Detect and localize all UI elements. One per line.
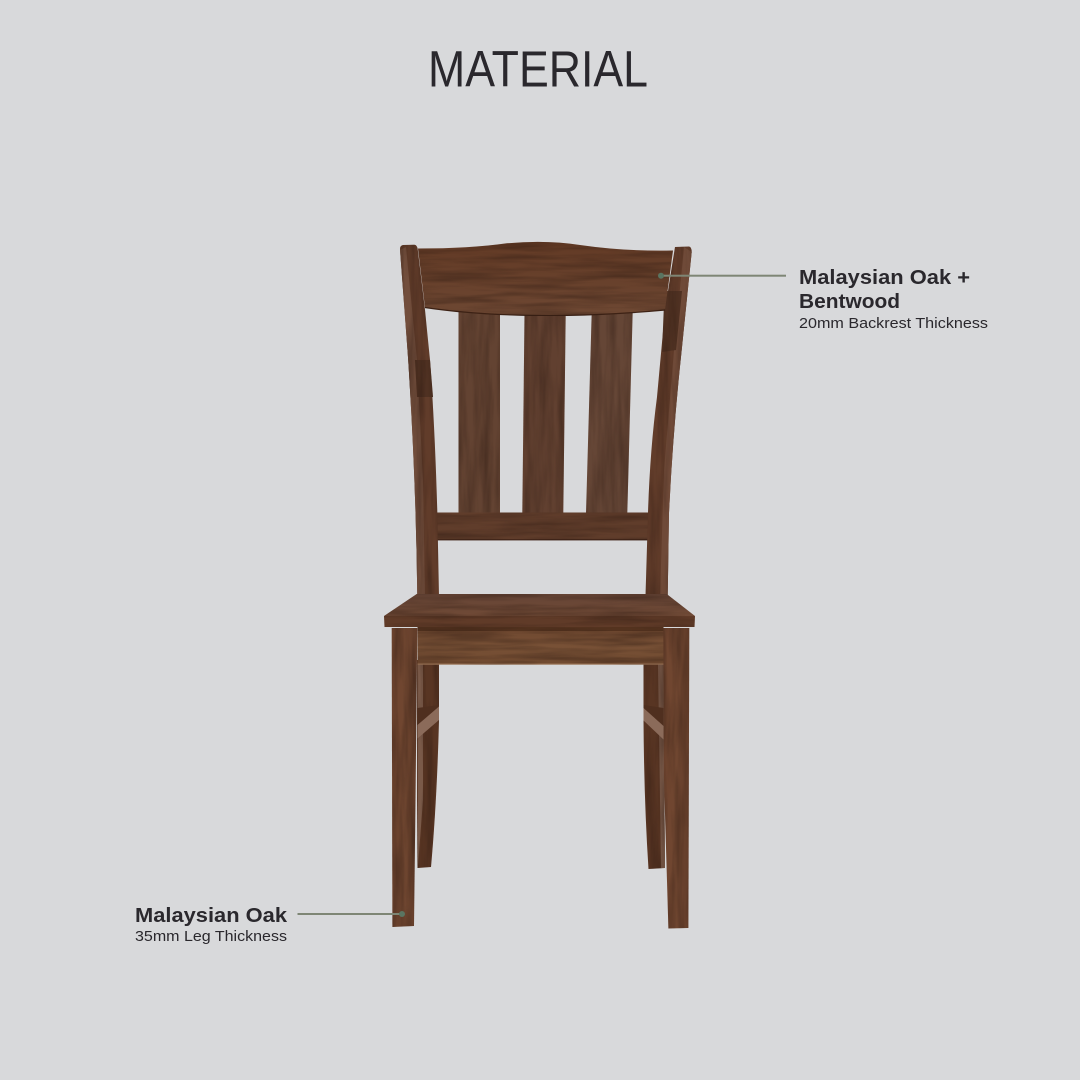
right back post — [646, 246, 692, 596]
chair illustration — [384, 242, 695, 928]
label: Malaysian Oak: Malaysian Oak — [135, 904, 288, 927]
front left leg — [392, 628, 417, 927]
title: MATERIAL — [428, 40, 648, 98]
left stretcher — [418, 705, 439, 738]
front right leg — [663, 628, 689, 928]
callout: leg material — [135, 904, 405, 945]
seat front edge — [384, 616, 695, 627]
seat — [384, 594, 695, 627]
label: Malaysian Oak + Bentwood: Malaysian Oak + — [799, 266, 970, 289]
leader line and dot: leg — [298, 911, 405, 917]
seat top — [384, 594, 695, 616]
lower back rail — [436, 512, 650, 540]
left back post — [400, 245, 439, 596]
crest rail — [418, 242, 673, 316]
label: Malaysian Oak + Bentwood: Bentwood — [799, 290, 900, 313]
callout: backrest material — [658, 266, 988, 332]
back left leg — [417, 660, 439, 868]
apron — [418, 627, 664, 665]
sublabel: leg thickness: 35mm Leg Thickness — [135, 928, 287, 945]
backrest slats — [458, 311, 633, 513]
leader line and dot: backrest — [658, 273, 786, 279]
sublabel: backrest thickness: 20mm Backrest Thickness — [799, 315, 988, 332]
back right leg — [644, 660, 665, 869]
right stretcher — [644, 705, 664, 740]
